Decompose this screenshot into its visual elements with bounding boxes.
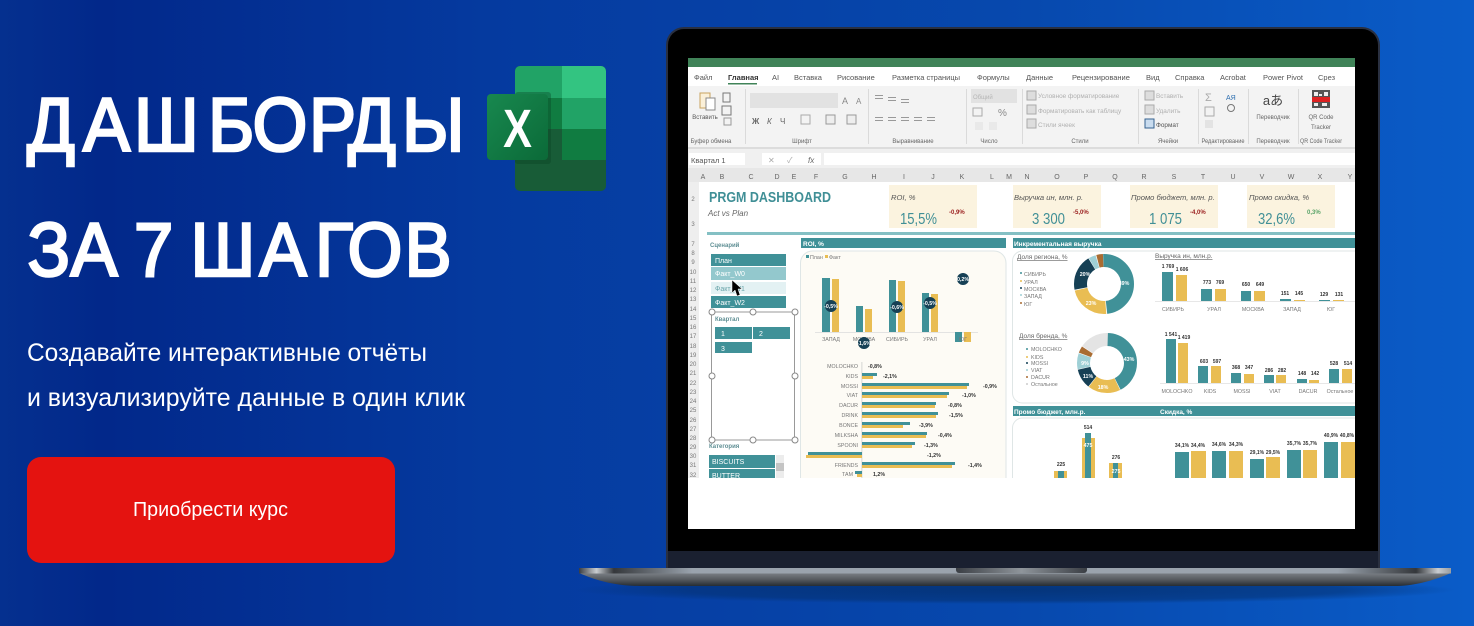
row headers: 26 [690, 418, 697, 424]
row headers [688, 182, 699, 479]
KPI: revenue: Выручка ин, млн. р. [1014, 193, 1083, 202]
row headers: 18 [690, 344, 697, 350]
ribbon: A [856, 97, 862, 106]
panel: ROI: План [810, 255, 823, 261]
row headers: 11 [690, 279, 697, 285]
revenue by brand bars: 142 [1311, 371, 1319, 377]
ribbon: aあ [1263, 93, 1283, 108]
slicer: quarter: Квартал [715, 317, 739, 323]
promo budget bars: 514 [1084, 425, 1092, 431]
KPI: promo budget: 1 075 [1149, 211, 1182, 228]
region share donut: УРАЛ [1024, 280, 1038, 286]
laptop screen: excel window [688, 58, 1378, 529]
title: ЗА 7 ШАГОВ [28, 208, 452, 293]
icon: mouse cursor [732, 280, 742, 296]
KPI: ROI: -0,9% [949, 210, 965, 216]
slicer: scenario: Сценарий [710, 242, 740, 249]
slicer: quarter [709, 309, 798, 443]
slicer: category: BUTTER [712, 473, 740, 480]
ribbon: Ячейки [1158, 138, 1178, 145]
panel: incremental revenue [1012, 238, 1372, 403]
revenue by brand bars: 347 [1245, 365, 1253, 371]
ribbon: % [998, 108, 1007, 119]
dashboard title [707, 190, 831, 218]
brand share donut: VIAT [1031, 368, 1043, 374]
row headers: 17 [690, 334, 697, 340]
promo budget bars: 276 [1112, 455, 1120, 461]
ROI by brand horizontal bars: SHOKO [839, 453, 858, 459]
revenue by brand bars: 1 419 [1178, 335, 1190, 341]
brand share donut: KIDS [1031, 355, 1044, 361]
column headers: M [1006, 174, 1012, 181]
row headers: 29 [690, 445, 697, 451]
ROI by region bars: ЗАПАД [822, 337, 840, 343]
button: buy course: Приобрести курс [133, 499, 288, 521]
row headers: 27 [690, 427, 697, 433]
column headers: Q [1112, 174, 1118, 181]
row headers: 3 [691, 222, 695, 228]
revenue by region bars: 1 606 [1176, 267, 1188, 273]
column headers: D [774, 174, 780, 181]
ROI by brand horizontal bars: -1,4% [968, 463, 982, 469]
formula bar: ✕ [768, 156, 775, 165]
revenue by brand bars: MOSSI [1233, 389, 1251, 395]
revenue by region bars: 650 [1242, 282, 1250, 288]
column headers: L [990, 174, 994, 181]
ROI by brand horizontal bars: -1,0% [962, 393, 976, 399]
ROI by brand horizontal bars [806, 362, 997, 478]
formula bar [688, 149, 1355, 168]
ROI by brand horizontal bars: 1,2% [873, 472, 885, 478]
region share donut: ЮГ [1024, 302, 1032, 308]
ribbon: К [767, 117, 773, 126]
region share donut [1017, 254, 1130, 308]
discount bars: 34,1% [1175, 443, 1190, 449]
region share donut: МОСКВА [1024, 287, 1047, 293]
row headers: 31 [690, 463, 697, 469]
ribbon: Стили [1071, 139, 1089, 145]
promo budget bars: 225 [1057, 462, 1065, 468]
brand share donut: Остальное [1031, 382, 1058, 388]
ROI by region bars: -0,5% [923, 301, 937, 307]
ribbon: A [842, 96, 848, 106]
revenue by region bars: 769 [1216, 280, 1224, 286]
ribbon: AЯ [1226, 95, 1236, 102]
revenue by region bars: 1 769 [1162, 264, 1174, 270]
row headers: 13 [690, 297, 697, 303]
revenue by region bars: МОСКВА [1242, 307, 1265, 313]
column headers: B [720, 174, 725, 181]
ROI by brand horizontal bars: DRINK [842, 413, 858, 419]
column headers: O [1054, 174, 1060, 181]
discount bars: 29,5% [1266, 450, 1281, 456]
KPI: promo discount: Промо скидка, % [1249, 193, 1309, 202]
ROI by region bars: -1,6% [857, 341, 871, 347]
KPI: revenue [1013, 185, 1101, 228]
KPI: promo budget [1130, 185, 1218, 228]
revenue by region bars: 649 [1256, 282, 1264, 288]
revenue by brand bars: MOLOCHKO [1162, 389, 1192, 395]
revenue by brand bars: VIAT [1269, 389, 1281, 395]
column headers: F [814, 174, 818, 181]
column headers: G [842, 174, 848, 181]
column headers: I [903, 174, 905, 181]
ribbon: Формат [1156, 122, 1179, 129]
ROI by brand horizontal bars: ТАМ [842, 472, 853, 478]
row headers: 2 [691, 197, 695, 203]
icon: excel logo [487, 66, 606, 191]
ribbon tabs: Вид [1146, 73, 1160, 82]
ribbon: QR Code [1308, 115, 1334, 121]
revenue by brand bars: Остальное [1327, 389, 1353, 395]
ROI by brand horizontal bars: BONCE [839, 423, 858, 429]
discount bars: 34,3% [1229, 442, 1244, 448]
brand share donut: 18% [1098, 385, 1109, 391]
revenue by brand bars: 286 [1265, 368, 1273, 374]
panel: promo budget and discount [1012, 406, 1372, 498]
screen right edge bezel [1355, 58, 1378, 529]
revenue by brand bars: 528 [1330, 361, 1338, 367]
brand share donut: 43% [1124, 357, 1135, 363]
row headers: 16 [690, 325, 697, 331]
revenue by brand bars: 1 541 [1165, 332, 1177, 338]
revenue by region bars: 151 [1281, 291, 1289, 297]
revenue by region bars [1155, 253, 1355, 313]
row headers: 21 [690, 371, 697, 377]
promo budget bars: 275 [1112, 469, 1120, 475]
discount bars: 40,9% [1324, 433, 1339, 439]
laptop base [579, 568, 1451, 586]
ribbon tabs: Главная [728, 73, 759, 82]
brand share donut [1019, 332, 1135, 391]
column headers: J [931, 174, 935, 181]
panel: ROI: Факт [829, 255, 841, 261]
KPI: promo budget: Промо бюджет, млн. р. [1131, 193, 1215, 202]
ribbon tabs: Power Pivot [1263, 73, 1304, 82]
ROI by brand horizontal bars: -1,5% [949, 413, 963, 419]
formula bar: Квартал 1 [691, 156, 726, 165]
ribbon: Удалить [1156, 108, 1181, 115]
title [27, 83, 465, 293]
slicer: scenario: Факт_W0 [715, 271, 745, 278]
row headers: 7 [691, 242, 695, 248]
column headers: A [701, 174, 706, 181]
KPI: promo discount: 0,3% [1307, 210, 1321, 216]
laptop lid [666, 27, 1380, 568]
revenue by brand bars: 368 [1232, 365, 1240, 371]
brand share donut: DACUR [1031, 375, 1050, 381]
slicer: category [709, 444, 784, 480]
row headers: 23 [690, 390, 697, 396]
ribbon: Общий [973, 94, 993, 101]
column headers: P [1084, 174, 1089, 181]
KPI: revenue: 3 300 [1032, 211, 1065, 228]
revenue by region bars: 129 [1320, 292, 1328, 298]
ribbon tabs: Вставка [794, 73, 823, 82]
region share donut: ЗАПАД [1024, 294, 1042, 300]
ribbon: Буфер обмена [691, 139, 732, 145]
subtitle [27, 339, 466, 412]
dashboard title: Act vs Plan [707, 209, 749, 218]
button: buy course [27, 457, 395, 563]
column headers: R [1141, 174, 1147, 181]
column headers: E [792, 174, 797, 181]
panel: promo budget and discount: Скидка, % [1160, 409, 1193, 416]
column headers: H [871, 174, 877, 181]
revenue by brand bars: 148 [1298, 371, 1306, 377]
column headers: U [1230, 174, 1236, 181]
row headers: 24 [690, 399, 697, 405]
ROI by region bars: -0,6% [890, 305, 904, 311]
ribbon: Стили ячеек [1038, 122, 1075, 129]
subtitle: Создавайте интерактивные отчёты [27, 339, 427, 367]
column headers: V [1260, 174, 1265, 181]
ROI by brand horizontal bars: KIDS [846, 374, 858, 380]
ROI by brand horizontal bars: SPOONI [837, 443, 858, 449]
column headers: K [960, 174, 965, 181]
column headers: Y [1348, 174, 1353, 181]
KPI: revenue: -5,0% [1073, 210, 1089, 216]
slicer: quarter: 1 [721, 331, 725, 338]
ROI by brand horizontal bars: -0,9% [983, 384, 997, 390]
dashboard title: PRGM DASHBOARD [709, 190, 831, 206]
ribbon: Форматировать как таблицу [1038, 107, 1122, 115]
ribbon: Переводчик [1256, 115, 1290, 121]
ribbon: Число [980, 139, 998, 145]
column headers: S [1172, 174, 1177, 181]
ROI by brand horizontal bars: FRIENDS [835, 463, 858, 469]
slicer: category: BISCUITS [712, 459, 745, 466]
ROI by brand horizontal bars: DACUR [839, 403, 858, 409]
ROI by brand horizontal bars: -0,8% [948, 403, 962, 409]
ribbon tabs: Рецензирование [1072, 73, 1130, 82]
panel: ROI [800, 238, 1006, 491]
slicer: scenario: Факт_W2 [715, 300, 745, 307]
slicer: quarter: 3 [721, 346, 725, 353]
revenue by region bars: 145 [1295, 291, 1303, 297]
revenue by region bars: ЗАПАД [1283, 307, 1301, 313]
ROI by brand horizontal bars: MOLOCHKO [827, 364, 858, 370]
ribbon: Ж [751, 117, 760, 126]
brand share donut: Доля бренда, % [1019, 332, 1068, 340]
discount bars: 35,7% [1303, 441, 1318, 447]
region share donut: 23% [1086, 301, 1097, 307]
revenue by region bars: Выручка ин, млн.р. [1155, 253, 1213, 260]
row headers: 15 [690, 316, 697, 322]
ROI by brand horizontal bars: -0,8% [868, 364, 882, 370]
panel: incremental revenue: Инкрементальная выручка [1014, 241, 1102, 248]
promo budget bars: 475 [1084, 443, 1092, 449]
ribbon: Условное форматирование [1038, 93, 1120, 100]
revenue by brand bars: 514 [1344, 361, 1352, 367]
row headers: 20 [690, 362, 697, 368]
ribbon: Выравнивание [892, 139, 934, 145]
revenue by region bars: 131 [1335, 292, 1343, 298]
slicer: scenario [710, 242, 786, 308]
row headers: 9 [691, 260, 695, 266]
ribbon tabs: Формулы [977, 73, 1010, 82]
slicer: category: Категория [709, 444, 740, 450]
revenue by region bars: 773 [1203, 280, 1211, 286]
ribbon tabs: Файл [694, 73, 712, 82]
row headers: 10 [690, 270, 697, 276]
discount bars: 34,4% [1191, 443, 1206, 449]
ribbon tabs: Acrobat [1220, 73, 1247, 82]
revenue by region bars: СИБИРЬ [1162, 307, 1184, 313]
column headers: W [1288, 174, 1295, 181]
KPI: ROI: 15,5% [900, 211, 937, 228]
ribbon: Ч [780, 117, 785, 126]
row headers: 8 [691, 251, 695, 257]
revenue by brand bars: 603 [1200, 359, 1208, 365]
ROI by brand horizontal bars: -1,3% [924, 443, 938, 449]
panel: promo budget and discount: Промо бюджет, млн.р. [1014, 408, 1086, 416]
ROI by brand horizontal bars: -2,1% [883, 374, 897, 380]
row headers: 12 [690, 288, 697, 294]
subtitle: и визуализируйте данные в один клик [27, 384, 466, 412]
ribbon: Σ [1205, 92, 1212, 104]
revenue by brand bars: KIDS [1204, 389, 1217, 395]
KPI: ROI: ROI, % [891, 193, 916, 202]
ROI by brand horizontal bars: MILKSHA [835, 433, 858, 439]
KPI: promo discount [1247, 185, 1335, 228]
discount bars: 40,8% [1340, 433, 1355, 439]
ribbon: QR Code Tracker [1300, 139, 1342, 145]
revenue by brand bars: 597 [1213, 359, 1221, 365]
row headers: 22 [690, 381, 697, 387]
ROI by brand horizontal bars: MOSSI [841, 384, 858, 390]
revenue by brand bars [1160, 332, 1355, 395]
ROI by region bars [815, 273, 978, 349]
revenue by region bars: УРАЛ [1207, 307, 1221, 313]
ribbon tabs: Справка [1175, 73, 1205, 82]
discount bars: 35,7% [1287, 441, 1302, 447]
KPI: promo discount: 32,6% [1258, 211, 1295, 228]
ROI by region bars: СИБИРЬ [886, 337, 908, 343]
ribbon tabs [694, 73, 1336, 84]
slicer: scenario: Факт_W1 [715, 286, 745, 293]
row headers: 28 [690, 436, 697, 442]
promo budget bars [1054, 425, 1122, 478]
discount bars: 34,6% [1212, 442, 1227, 448]
ROI by region bars: -0,5% [824, 304, 838, 310]
brand share donut: 11% [1083, 374, 1093, 380]
screen bottom blank area [688, 478, 1355, 529]
row headers: 32 [690, 473, 697, 479]
formula bar: fx [808, 156, 815, 165]
ROI by brand horizontal bars: -3,9% [919, 423, 933, 429]
ribbon tabs: Срез [1318, 73, 1336, 82]
ribbon tabs: Разметка страницы [892, 73, 960, 82]
ribbon tabs: Рисование [837, 73, 875, 82]
region share donut: Доля региона, % [1017, 254, 1068, 261]
ROI by brand horizontal bars: -0,4% [938, 433, 952, 439]
ROI by region bars: УРАЛ [923, 337, 937, 343]
KPI: ROI [889, 185, 977, 228]
revenue by brand bars: DACUR [1299, 389, 1318, 395]
ROI by region bars: ЮГ [959, 337, 967, 343]
ribbon [688, 86, 1355, 149]
ROI by brand horizontal bars: -1,2% [927, 453, 941, 459]
ribbon tabs: AI [772, 73, 779, 82]
brand share donut: MOSSI [1031, 361, 1048, 367]
column headers [688, 168, 1355, 182]
column headers: X [1318, 174, 1323, 181]
icon: excel logo: X [503, 100, 532, 159]
row headers: 25 [690, 408, 697, 414]
ROI by region bars: 0,2% [957, 277, 969, 283]
ribbon: Вставить [692, 115, 718, 121]
ribbon: Tracker [1311, 125, 1331, 131]
laptop [575, 27, 1455, 604]
title: ДАШБОРДЫ [27, 83, 465, 168]
ROI by brand horizontal bars: VIAT [847, 393, 859, 399]
slicer: quarter: 2 [759, 331, 763, 338]
panel: ROI: ROI, % [803, 241, 824, 248]
discount bars [1175, 433, 1355, 478]
ribbon tabs: Данные [1026, 73, 1053, 82]
ribbon: Вставить [1156, 93, 1184, 100]
discount bars: 29,1% [1250, 450, 1265, 456]
brand share donut: MOLOCHKO [1031, 347, 1062, 353]
row headers: 19 [690, 353, 697, 359]
ribbon: Шрифт [792, 139, 812, 145]
column headers: C [748, 174, 754, 181]
ROI by region bars: МОСКВА [853, 337, 876, 343]
column headers: T [1201, 174, 1206, 181]
slicer: scenario: План [715, 258, 732, 265]
region share donut: 20% [1080, 272, 1091, 278]
KPI: promo budget: -4,0% [1190, 210, 1206, 216]
formula bar: ✓ [787, 156, 793, 165]
ribbon: Редактирование [1202, 139, 1245, 145]
region share donut: 49% [1119, 281, 1130, 287]
ribbon: Переводчик [1256, 139, 1290, 145]
brand share donut: 9% [1081, 361, 1089, 367]
revenue by region bars: ЮГ [1327, 307, 1335, 313]
column headers: N [1024, 174, 1030, 181]
row headers: 14 [690, 307, 697, 313]
region share donut: СИБИРЬ [1024, 272, 1046, 278]
row headers: 30 [690, 454, 697, 460]
revenue by brand bars: 282 [1278, 368, 1286, 374]
